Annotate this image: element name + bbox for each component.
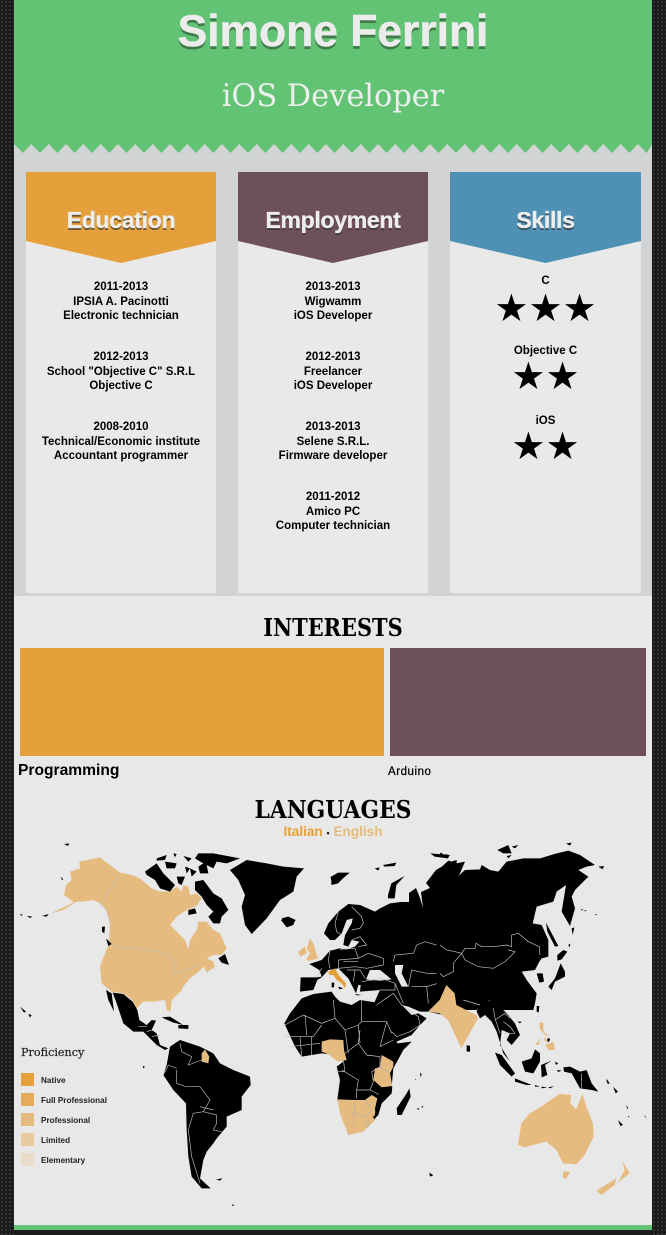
arctic islands — [331, 853, 450, 898]
job subtitle: iOS Developer — [222, 78, 444, 114]
legend label native: Native — [41, 1076, 66, 1085]
skill Objective C label: Objective C — [514, 345, 577, 357]
footer green bar — [14, 1225, 652, 1230]
employment entry 3: Firmware developer — [279, 450, 387, 462]
skill iOS stars: ★★ — [511, 424, 580, 468]
central and southern africa — [322, 1030, 433, 1177]
southern africa — [337, 1095, 377, 1135]
education entry 3: Accountant programmer — [54, 450, 188, 462]
pacific islands — [606, 1078, 646, 1126]
header green zigzag background — [14, 0, 652, 153]
australia and new zealand — [518, 1093, 630, 1195]
employment entry 4: Amico PC — [306, 506, 360, 518]
panel: education — [26, 172, 216, 593]
russia and china — [437, 851, 595, 1010]
north america borders — [101, 873, 200, 974]
central and east asia borders — [440, 933, 540, 977]
employment entry 4 — [276, 491, 390, 532]
education entry 2 — [47, 351, 195, 392]
new guinea border — [581, 1073, 583, 1088]
education entry 1: IPSIA A. Pacinotti — [73, 296, 169, 308]
employment entry 3: 2013-2013 — [306, 421, 360, 433]
africa — [284, 992, 412, 1135]
interest block: programming — [20, 648, 384, 756]
europe, middle east and africa — [284, 860, 457, 1135]
languages list: Italian • English — [283, 824, 383, 839]
employment entry 2: 2012-2013 — [306, 351, 360, 363]
skill C label: C — [541, 275, 550, 287]
education entry 2: Objective C — [89, 380, 153, 392]
legend label elementary: Elementary — [41, 1156, 85, 1165]
education entry 3: Technical/Economic institute — [42, 436, 200, 448]
lower section background — [14, 596, 652, 1225]
panel: skills — [450, 172, 641, 593]
employment entry 2: Freelancer — [304, 366, 362, 378]
skills heading: Skills — [516, 207, 575, 233]
skill iOS label: iOS — [536, 415, 555, 427]
legend swatch elementary — [21, 1153, 34, 1166]
employment banner — [238, 172, 428, 263]
sakhalin, korea, japan and northern islands — [440, 843, 604, 990]
central africa borders — [337, 1030, 380, 1098]
southeast asia — [463, 1000, 609, 1092]
legend swatch limited — [21, 1133, 34, 1146]
employment entry 2 — [294, 351, 372, 392]
education entry 1 — [63, 281, 179, 322]
south america — [163, 1040, 251, 1188]
nigeria and cameroon — [322, 1039, 347, 1062]
legend label professional: Professional — [41, 1116, 90, 1125]
employment entry 4: 2011-2012 — [306, 491, 360, 503]
philippines — [535, 1023, 555, 1050]
employment heading: Employment — [265, 207, 401, 233]
employment entry 2: iOS Developer — [294, 380, 372, 392]
mexico and central america — [106, 990, 168, 1050]
lesotho — [365, 1122, 370, 1127]
india — [428, 985, 478, 1048]
education banner — [26, 172, 216, 263]
employment entry 3 — [279, 421, 388, 462]
legend label limited: Limited — [41, 1136, 70, 1145]
south america borders — [163, 1043, 222, 1183]
right page frame — [652, 0, 666, 1235]
interest block: arduino — [390, 648, 646, 756]
europe, middle east and north africa borders — [285, 907, 450, 1057]
education entry 3 — [42, 421, 200, 462]
kenya and tanzania — [373, 1055, 393, 1087]
education entry 2: 2012-2013 — [94, 351, 148, 363]
interest label: programming: Programming — [18, 762, 119, 779]
indochina borders — [463, 1000, 515, 1033]
north america — [51, 857, 227, 1012]
oceania — [518, 1078, 646, 1195]
inland seas — [366, 965, 408, 987]
skill C stars: ★★★ — [494, 286, 597, 330]
legend label full professional: Full Professional — [41, 1096, 107, 1105]
employment entry 1: 2013-2013 — [306, 281, 360, 293]
legend title: Proficiency — [21, 1046, 84, 1059]
legend swatch native — [21, 1073, 34, 1086]
skills banner — [450, 172, 641, 263]
education heading: Education — [67, 207, 175, 233]
education entry 3: 2008-2010 — [94, 421, 148, 433]
interest label: arduino: Arduino — [388, 766, 432, 778]
uk and italy — [282, 917, 346, 988]
south asia and arctic russia islands — [331, 853, 490, 1048]
languages heading: LANGUAGES — [255, 794, 411, 824]
skill Objective C stars: ★★ — [511, 354, 580, 398]
arctic canada and atlantic islands — [20, 843, 333, 1206]
employment entry 4: Computer technician — [276, 520, 390, 532]
northeast india — [476, 1000, 490, 1017]
education entry 1: 2011-2013 — [94, 281, 148, 293]
southern africa borders — [345, 1067, 390, 1123]
employment entry 1: Wigwamm — [305, 296, 361, 308]
interests heading: INTERESTS — [263, 612, 403, 642]
ireland — [298, 947, 307, 957]
guyana — [202, 1049, 209, 1063]
mediterranean islands — [332, 983, 362, 995]
panel: employment — [238, 172, 428, 593]
islands of southeast asia — [467, 1006, 609, 1092]
americas and atlantic — [20, 843, 333, 1206]
employment entry 3: Selene S.R.L. — [297, 436, 369, 448]
employment entry 1: iOS Developer — [294, 310, 372, 322]
italy — [328, 968, 346, 988]
name title: Simone Ferrini — [178, 7, 488, 56]
education entry 1: Electronic technician — [63, 310, 179, 322]
world map — [20, 842, 646, 1206]
greenland — [230, 860, 304, 934]
iceland — [282, 917, 296, 925]
mozambique and madagascar — [373, 1073, 433, 1177]
europe and western asia — [300, 860, 457, 1042]
header section — [14, 0, 652, 596]
legend swatch full professional — [21, 1093, 34, 1106]
left page frame — [0, 0, 14, 1235]
employment entry 1 — [294, 281, 372, 322]
great britain — [306, 938, 318, 961]
indochina — [477, 1000, 520, 1062]
education entry 2: School "Objective C" S.R.L — [47, 366, 195, 378]
central america borders — [138, 1027, 160, 1037]
legend swatch professional — [21, 1113, 34, 1126]
east asia — [437, 843, 604, 1010]
